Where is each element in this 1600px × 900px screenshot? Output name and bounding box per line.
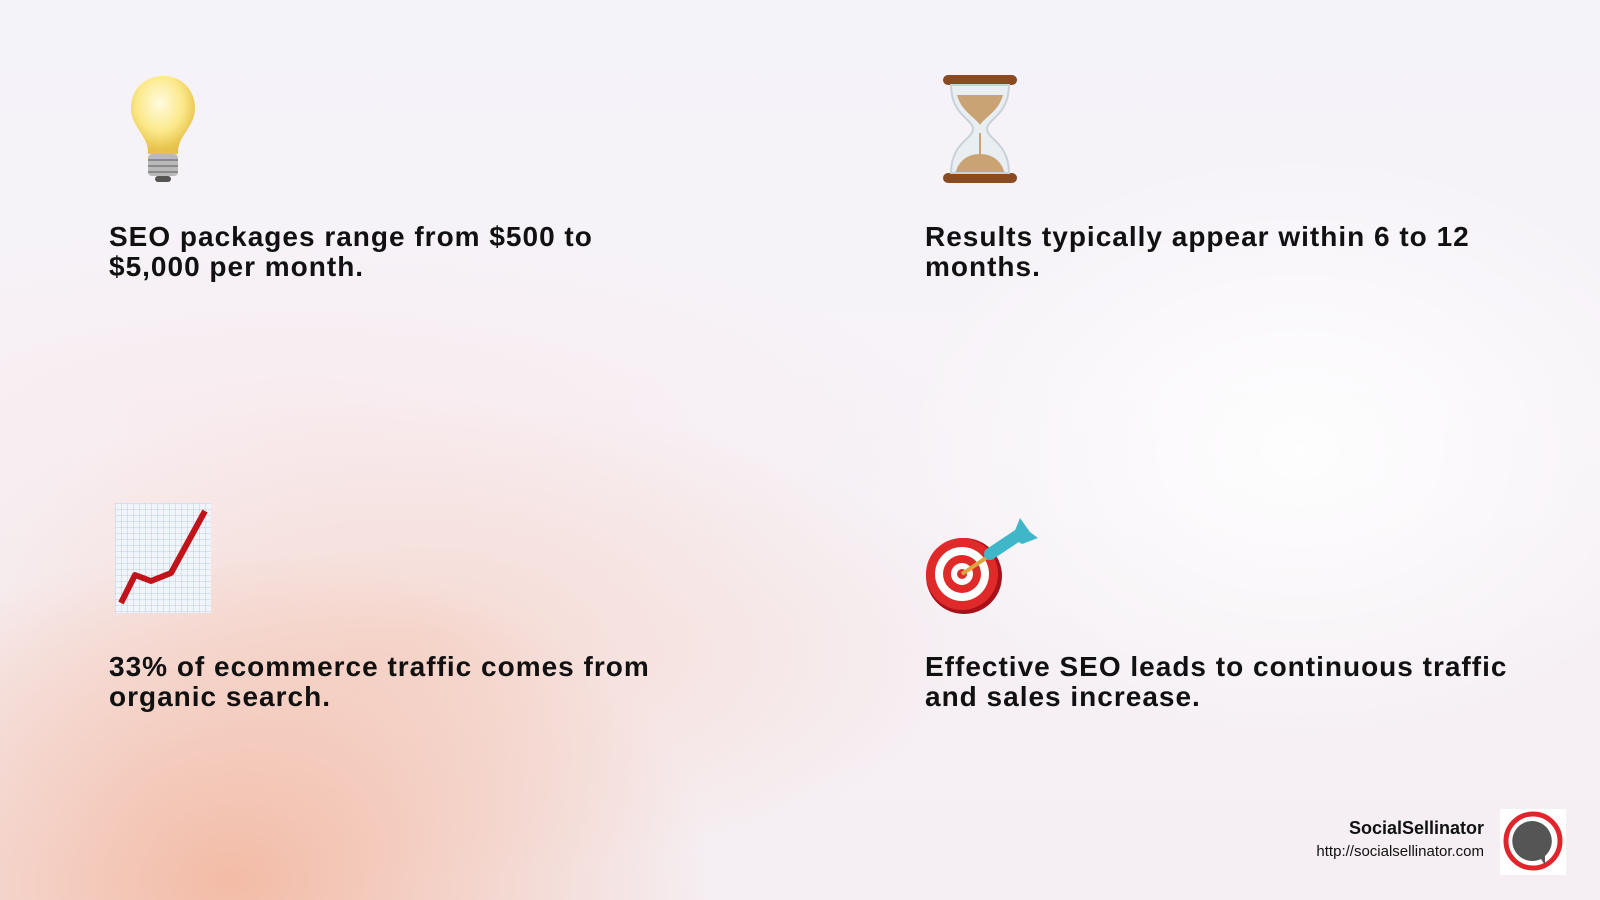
brand text: http://socialsellinator.com [1316, 843, 1484, 860]
text: results timing: Results typically appear within 6 to 12 months. [925, 221, 1470, 282]
icon: light bulb [131, 76, 195, 182]
text: effective SEO: Effective SEO leads to continuous traffic and sales increase. [925, 651, 1507, 712]
text: SEO packages: SEO packages range from $500 to $5,000 per month. [109, 221, 593, 282]
logo [1500, 809, 1566, 875]
text: ecommerce traffic: 33% of ecommerce traffic comes from organic search. [109, 651, 650, 712]
icon: hourglass [943, 75, 1017, 183]
brand text [1316, 818, 1484, 860]
brand text: SocialSellinator [1349, 818, 1484, 838]
icon: target with dart [926, 518, 1038, 614]
icon: chart increasing [115, 503, 211, 613]
